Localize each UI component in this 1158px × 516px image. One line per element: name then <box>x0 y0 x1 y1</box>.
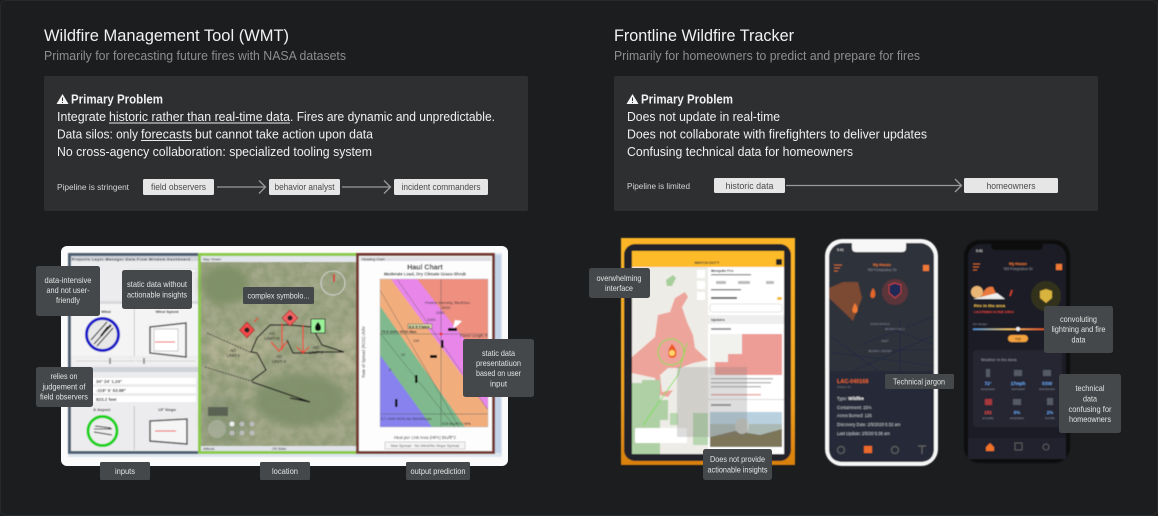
risk slider <box>973 322 1045 342</box>
haul chart: Heat per Unit Area (HPA) Btu/ft^2 <box>394 435 457 440</box>
heading: Frontline Wildfire Tracker <box>614 26 920 63</box>
phone: My House map: BEVERLY CENTER <box>868 349 892 353</box>
unit labels: AD <box>313 345 320 350</box>
pipeline diagram <box>57 179 488 195</box>
chart annotations: 535 Btu/ft^2 HPA <box>442 422 471 426</box>
chart annotations: 2000 <box>436 311 444 315</box>
unit labels: AD <box>230 348 237 353</box>
incident card: Last Update: 2/5/20 5:38 am <box>837 431 890 436</box>
chart annotations: 150 <box>413 339 419 343</box>
weather illustration <box>971 286 1015 314</box>
chart annotations: 1000 <box>427 318 435 322</box>
pipeline diagram: homeowners <box>986 181 1036 191</box>
problem statements: Does not collaborate with firefighters to deliver updates <box>627 126 927 142</box>
weather card: wind direction <box>1039 387 1055 391</box>
weather card: precipitation <box>1010 416 1025 420</box>
shield icon <box>1031 281 1061 311</box>
callout: static data presentation: presentatiuon <box>476 358 521 368</box>
incident card: LAC-040168 <box>837 379 868 385</box>
callout: relies on judgement <box>36 367 93 407</box>
pipeline diagram: Pipeline is stringent <box>57 182 130 192</box>
unit boundaries <box>251 325 344 402</box>
callout: overwhelming interface: overwhelming <box>596 273 642 283</box>
label: inputs <box>100 462 150 480</box>
slope gauge: 15° Slope <box>158 407 177 412</box>
aspect dial <box>88 407 117 446</box>
risk slider: fire danger <box>973 322 987 326</box>
weather card: 2% <box>1047 410 1053 415</box>
weather card: 152 <box>984 410 992 415</box>
phone: fire in the area: 789 Pompadour Dr <box>1003 267 1034 271</box>
incident card: Acres Burned: 125 <box>837 413 872 418</box>
unit labels: UNIT-II <box>272 359 286 364</box>
haul chart: Heading Chart <box>362 258 385 262</box>
callout: convoluting data <box>1044 306 1113 353</box>
phone: fire in the area: My House <box>1009 262 1027 266</box>
panel: Watch Duty tablet <box>621 238 795 465</box>
callout: static data presentation <box>463 339 534 397</box>
callout: convoluting data: lightning and fire <box>1052 324 1106 334</box>
chart annotations: 5.7 ch/hr ROS-No Wind/Slope <box>381 417 432 421</box>
callout: static data presentation: static data <box>482 348 515 358</box>
weather card: humidity <box>1045 416 1056 420</box>
weather illustration: Fire in the area <box>974 303 1006 308</box>
heading: Wildfire Management Tool <box>44 26 346 63</box>
callout: technical jargon: Technical jargon <box>893 376 945 386</box>
callout: relies on judgement: relies on <box>50 371 78 381</box>
unit labels <box>226 331 323 364</box>
callout: overwhelming interface <box>589 268 650 298</box>
slope gauge <box>150 407 187 444</box>
incident card: Type: Wildfire <box>837 396 864 401</box>
weather card: 0% <box>1014 410 1020 415</box>
problem statements: No cross-agency collaboration: specialized tooling system <box>57 144 372 159</box>
chart annotations <box>381 301 488 426</box>
chart annotations: 8 <box>389 368 391 372</box>
callout: convoluting data: data <box>1072 334 1086 344</box>
chart annotations: 79.5 ch/hr ROS-Max <box>381 330 418 334</box>
unit labels: AD <box>276 354 283 359</box>
pipeline diagram: Pipeline is limited <box>627 181 690 191</box>
chart annotations: 8000 <box>442 306 450 310</box>
app header <box>632 251 784 267</box>
app header: WATCH DUTY <box>694 261 720 265</box>
phone: My House map: My House <box>873 263 891 267</box>
problem statements <box>57 109 495 159</box>
fire markers <box>240 322 254 338</box>
callout: static data presentation: input <box>490 378 508 388</box>
panel: Frontline primary problem <box>614 76 1098 211</box>
label: output prediction <box>406 462 470 480</box>
phone: My House map: BEVERLY HILLS <box>885 327 905 331</box>
pipeline diagram: field observers <box>151 182 206 192</box>
phone: fire in the area <box>964 240 1070 463</box>
unit labels: UNIT-H <box>264 336 280 341</box>
problem heading: Primary Problem <box>71 92 163 106</box>
wind dial: Wind <box>101 309 111 314</box>
label: location: location <box>272 466 298 476</box>
phone: My House map <box>825 239 938 466</box>
label: output prediction: output prediction <box>410 466 466 476</box>
unit labels: UNIT-J <box>309 350 323 355</box>
icon: warning triangle <box>56 94 68 104</box>
problem statements: Confusing technical data for homeowners <box>627 144 853 159</box>
incident card: Wildfire ID <box>837 385 852 389</box>
callout: technical data confusing: technical <box>1076 383 1105 393</box>
panel: WMT primary problem <box>44 76 528 211</box>
incident card <box>829 371 934 462</box>
haul chart: Haul Chart <box>407 264 443 272</box>
incident sidebar <box>708 267 784 454</box>
icon: warning triangle <box>626 94 638 104</box>
weather card: SSW <box>1042 381 1053 386</box>
tab bar <box>968 438 1066 459</box>
unit labels: UNIT-I <box>226 353 240 358</box>
location map: Off Slider <box>272 447 287 451</box>
callout: technical data confusing: confusing for <box>1068 404 1112 414</box>
callout: data-intensive: and not user- <box>46 285 90 295</box>
phone: My House map: 9:41 <box>837 248 844 252</box>
wind speed gauge <box>150 309 186 357</box>
phone: My House map: SANTA MONICA <box>870 322 890 326</box>
weather card: Weather in the Area <box>981 358 1017 362</box>
chart annotations: 8.8 ft Flame <box>409 325 430 329</box>
heading: Wildfire Management Tool: Wildfire Management Tool (WMT) <box>44 26 289 45</box>
weather card: 72° <box>985 381 992 386</box>
pipeline diagram: historic data <box>726 181 774 191</box>
haul chart: Max Spread · No Wind/No Slope Spread <box>391 444 459 448</box>
green fire icon <box>311 319 325 333</box>
weather card: wind speed <box>1011 387 1025 391</box>
coordinates: -119° 5' 53.98" <box>96 388 126 393</box>
weather card <box>973 350 1062 427</box>
weather card: air quality <box>982 416 994 420</box>
callout: no actionable insights <box>703 449 772 480</box>
callout: data-intensive <box>36 266 100 316</box>
haul chart <box>355 252 496 455</box>
callout: static data presentation: based on user <box>476 368 521 378</box>
callout: overwhelming interface: interface <box>605 283 633 293</box>
problem statements <box>627 109 927 159</box>
problem statements: historic rather than real-time data <box>109 109 291 124</box>
coordinates: 34° 24' 1.24" <box>96 379 122 384</box>
chart annotations: Flame Length, ft <box>460 334 488 338</box>
screenshot contents <box>67 252 502 458</box>
heading: Wildfire Management Tool: Primarily for forecasting future fires with NASA datasets <box>44 49 346 63</box>
location map: Altitude <box>203 447 215 451</box>
weather illustration: LIGHTNING IN THE AREA <box>974 310 1015 314</box>
callout: data-intensive: friendly <box>56 295 81 305</box>
callout: no actionable insights: actionable insights <box>708 464 768 474</box>
pipeline diagram: behavior analyst <box>274 182 335 192</box>
coordinates: 923.2 feet <box>96 397 117 402</box>
problem statements: Data silos: only <box>57 126 138 142</box>
aspect dial: E Aspect <box>94 407 111 412</box>
callout: no actionable insights: Does not provide <box>710 454 765 464</box>
incident card: Containment: 15% <box>837 405 872 410</box>
problem statements: Integrate <box>57 109 106 124</box>
callout: technical data confusing: homeowners <box>1069 414 1111 424</box>
translucent overlay <box>677 367 747 437</box>
fire map <box>632 267 708 454</box>
problem statements: . Fires are dynamic and unpredictable. <box>290 109 495 124</box>
problem heading: Primary Problem <box>641 92 733 106</box>
callout: complex symbols: complex symbolo... <box>248 290 310 300</box>
incident sidebar: Updates <box>711 318 725 322</box>
chart annotations: 20 <box>401 353 405 357</box>
chart annotations: Fireline Intensity, Btu/ft/sec <box>425 301 470 305</box>
label: inputs: inputs <box>115 466 135 476</box>
wind dial <box>86 309 118 350</box>
problem statements: but cannot take action upon data <box>195 126 374 142</box>
pipeline diagram <box>627 178 1058 193</box>
coordinates <box>93 378 196 402</box>
weather card: 17mph <box>1011 381 1025 386</box>
haul chart: Moderate Load, Dry Climate Grass-Shrub <box>384 272 466 276</box>
callout: static data without insights: static data without <box>127 279 188 289</box>
callout: convoluting data: convoluting <box>1060 314 1097 324</box>
heading: Frontline Wildfire Tracker: Primarily for homeowners to predict and prepare for fires <box>614 49 920 63</box>
callout: complex symbols <box>243 287 314 304</box>
callout: technical jargon <box>885 374 954 389</box>
heading: Frontline Wildfire Tracker: Frontline Wildfire Tracker <box>614 26 794 45</box>
haul chart: Rate of Spread (ROS) ch/hr <box>361 326 366 378</box>
callout: technical data confusing <box>1059 374 1121 433</box>
incident sidebar: Mesquite Fire <box>711 269 734 273</box>
problem statements: forecasts <box>141 126 192 142</box>
location map: Map Viewer <box>203 258 222 262</box>
location map <box>198 253 357 454</box>
callout: static data without insights <box>122 270 192 309</box>
callout: relies on judgement: field observers <box>40 392 88 402</box>
incident card: Discovery Date: 2/5/2020 5:32 am <box>837 422 901 427</box>
compass <box>321 271 345 295</box>
inputs column <box>68 253 199 454</box>
weather card: temperature <box>981 387 996 391</box>
phone: My House map: 789 Pompadour Dr <box>867 268 898 272</box>
fire behavior icons <box>395 320 462 407</box>
wind speed gauge: Wind Speed <box>156 309 179 314</box>
panel: WMT screenshot <box>61 246 508 466</box>
risk slider: High <box>1015 337 1022 341</box>
label: location <box>260 462 310 480</box>
callout: static data without insights: actionable insights <box>127 290 187 300</box>
callout: relies on judgement: judgement of <box>42 382 86 392</box>
inputs column: Projects Layer Manager Data Flow Window Dashboard <box>72 258 190 262</box>
callout: data-intensive: data-intensive <box>44 275 92 285</box>
phone: My House map: WEST <box>881 339 889 343</box>
phone: fire in the area: 9:41 <box>976 249 983 253</box>
callout: technical data confusing: data <box>1083 394 1097 404</box>
problem statements: Does not update in real-time <box>627 109 780 124</box>
pipeline diagram: incident commanders <box>402 182 481 192</box>
unit labels: AD <box>269 331 276 336</box>
